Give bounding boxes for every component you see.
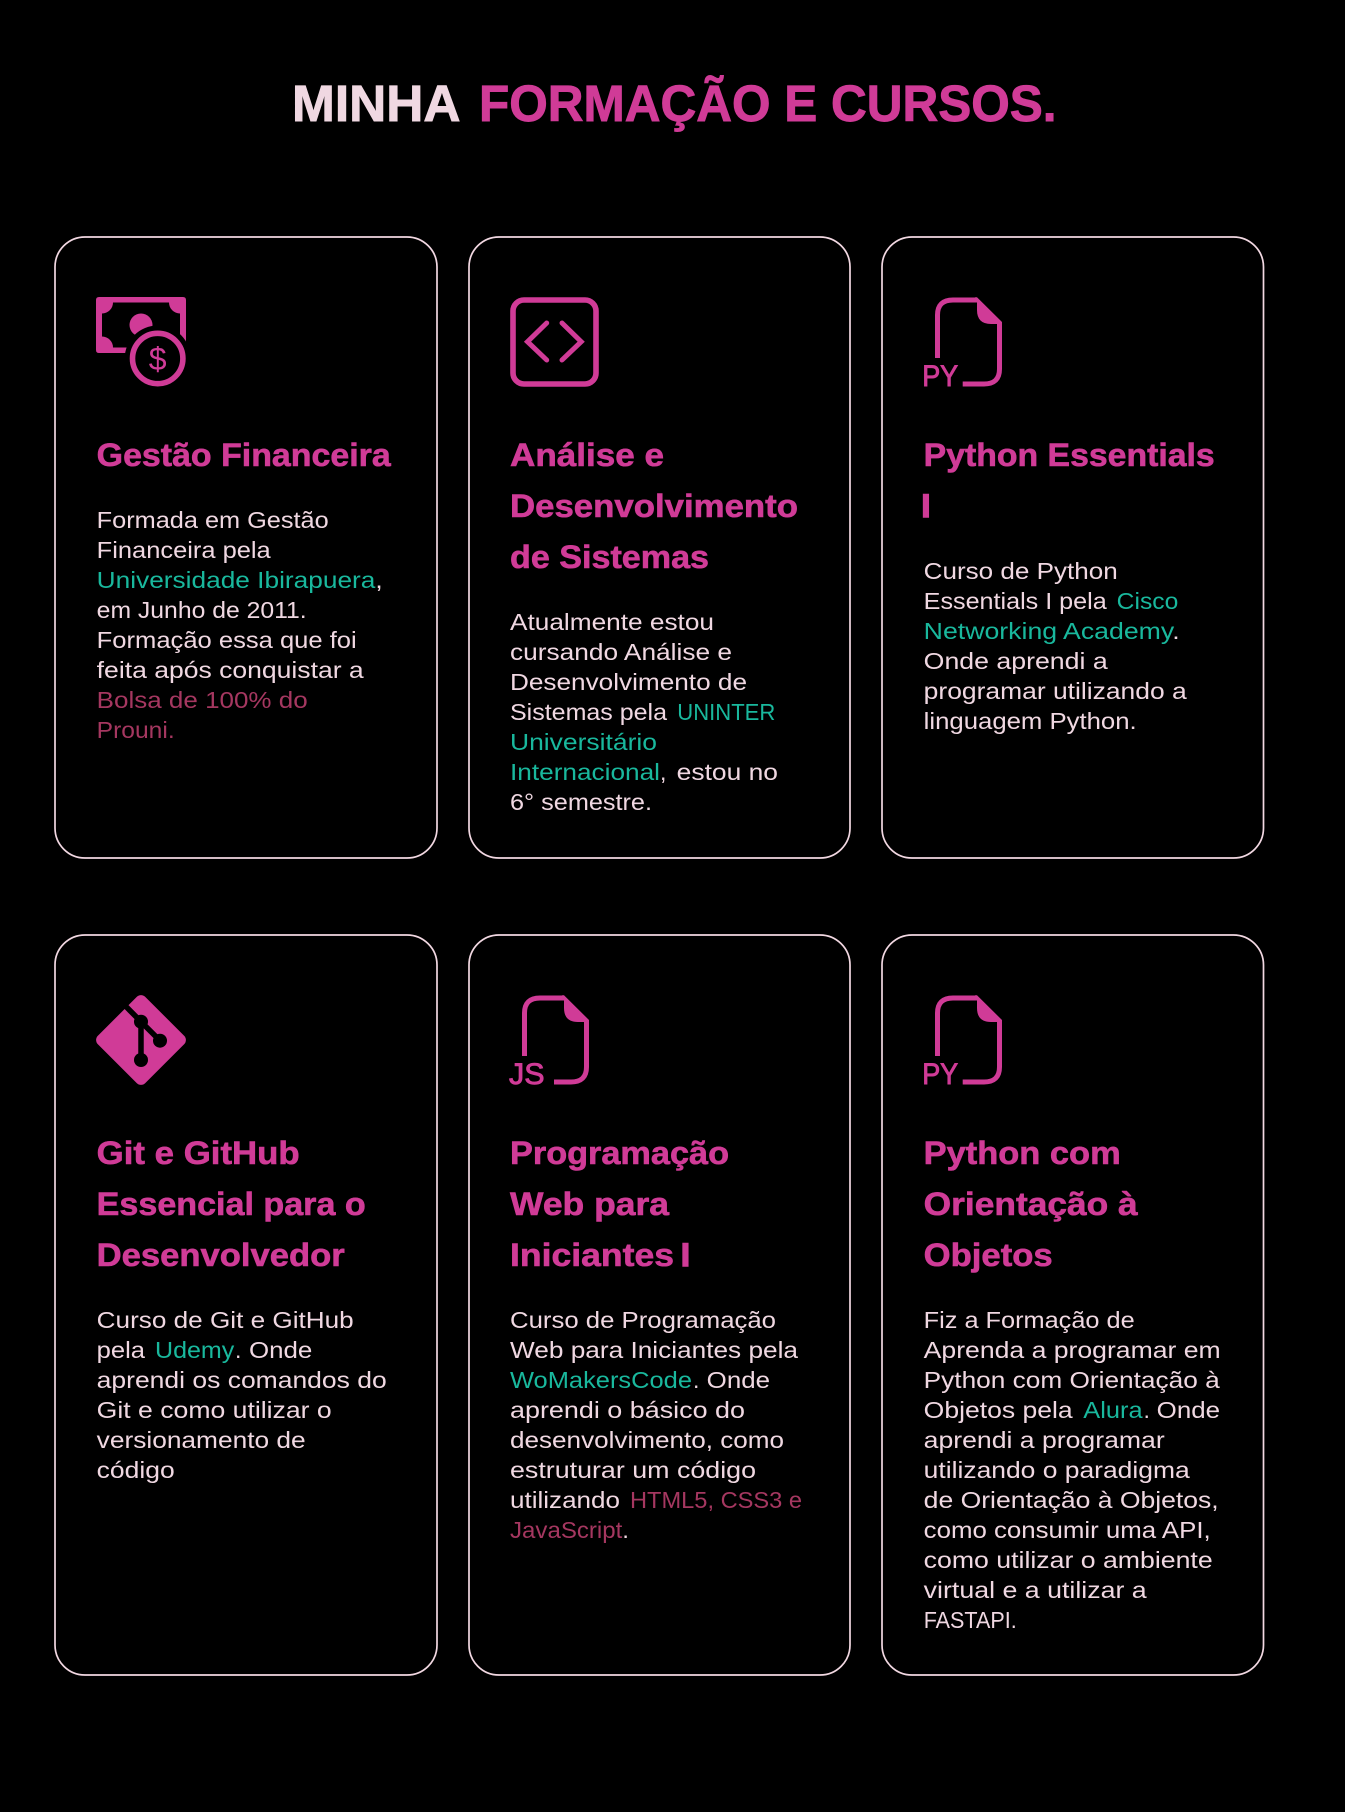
text block: estou no xyxy=(677,759,778,785)
text block: . xyxy=(1144,1397,1150,1423)
panel: Gestão Financeira xyxy=(55,237,437,858)
heading: de Sistemas xyxy=(510,539,709,575)
text block: de Orientação à Objetos, xyxy=(924,1487,1219,1513)
text block: como utilizar o ambiente xyxy=(924,1547,1213,1573)
text block: Financeira pela xyxy=(97,537,271,563)
icon: money bill and coin: $ xyxy=(149,341,167,377)
text block: Universitário xyxy=(510,729,657,755)
text block: FASTAPI. xyxy=(924,1607,1017,1633)
heading: Objetos xyxy=(924,1237,1053,1273)
text block: pela xyxy=(97,1337,145,1363)
text block: feita após conquistar a xyxy=(97,657,364,683)
icon: JS file xyxy=(509,995,589,1091)
icon: git logo xyxy=(94,993,188,1087)
text block xyxy=(97,1307,387,1483)
icon: PY file: PY xyxy=(922,1058,958,1091)
text block: Fiz a Formação de xyxy=(924,1307,1135,1333)
heading: Iniciantes xyxy=(510,1237,674,1273)
text block: programar utilizando a xyxy=(924,678,1187,704)
text block: utilizando xyxy=(510,1487,620,1513)
text block: Curso de Programação xyxy=(510,1307,776,1333)
text block: em Junho de 2011. xyxy=(97,597,307,623)
heading: Python Essentials xyxy=(924,437,1215,473)
text block: virtual e a utilizar a xyxy=(924,1577,1147,1603)
title: FORMAÇÃO E CURSOS. xyxy=(479,74,1056,132)
text block: aprendi a programar xyxy=(924,1427,1165,1453)
text block: linguagem Python. xyxy=(924,708,1137,734)
icon: JS file: JS xyxy=(509,1058,544,1091)
text block: código xyxy=(97,1457,175,1483)
text block: Aprenda a programar em xyxy=(924,1337,1221,1363)
text block: Cisco xyxy=(1117,588,1178,614)
heading xyxy=(922,437,1215,524)
text block: como consumir uma API, xyxy=(924,1517,1211,1543)
heading: Programação xyxy=(510,1135,729,1171)
text block: versionamento de xyxy=(97,1427,306,1453)
heading: Git e GitHub xyxy=(97,1135,300,1171)
heading: Orientação à xyxy=(924,1186,1138,1222)
text block: HTML5, CSS3 e xyxy=(630,1487,802,1513)
text block xyxy=(510,1307,802,1543)
text block xyxy=(510,609,778,815)
icon: code brackets xyxy=(513,300,596,384)
text block xyxy=(924,1307,1221,1633)
heading: Desenvolvedor xyxy=(97,1237,345,1273)
heading xyxy=(97,1135,366,1273)
heading xyxy=(510,1135,729,1273)
text block: aprendi o básico do xyxy=(510,1397,745,1423)
text block: estruturar um código xyxy=(510,1457,756,1483)
text block: . xyxy=(235,1337,241,1363)
heading: Gestão Financeira xyxy=(97,437,391,473)
text block: Onde aprendi a xyxy=(924,648,1108,674)
text block: Onde xyxy=(1157,1397,1220,1423)
text block: Curso de Python xyxy=(924,558,1118,584)
heading: Essencial para o xyxy=(97,1186,366,1222)
text block: desenvolvimento, como xyxy=(510,1427,784,1453)
text block: Onde xyxy=(249,1337,312,1363)
icon: PY file xyxy=(922,995,1002,1091)
heading xyxy=(510,437,798,575)
heading: Análise e xyxy=(510,437,664,473)
text block: Prouni. xyxy=(97,717,175,743)
text block: Universidade Ibirapuera , xyxy=(97,567,383,593)
text block: Objetos pela xyxy=(924,1397,1073,1423)
text block: aprendi os comandos do xyxy=(97,1367,387,1393)
heading: I xyxy=(922,488,930,524)
text block: Curso de Git e GitHub xyxy=(97,1307,354,1333)
text block: UNINTER xyxy=(677,699,775,725)
text block: Onde xyxy=(707,1367,770,1393)
text block: JavaScript. xyxy=(510,1517,629,1543)
text block: Bolsa de 100% do xyxy=(97,687,308,713)
text block: WoMakersCode xyxy=(510,1367,692,1393)
title: MINHA xyxy=(292,75,460,132)
text block: Essentials I pela xyxy=(924,588,1107,614)
heading: I xyxy=(681,1237,690,1273)
panel: Git e GitHub xyxy=(55,935,437,1675)
text block xyxy=(97,507,383,743)
icon: money bill and coin xyxy=(96,297,191,392)
text block: Python com Orientação à xyxy=(924,1367,1220,1393)
icon: PY file xyxy=(922,297,1002,393)
text block: Formada em Gestão xyxy=(97,507,329,533)
heading: Python com xyxy=(924,1135,1121,1171)
panel: Análise e Desenvolvimento de Sistemas xyxy=(469,237,850,858)
panel: Programação Web para Iniciantes I xyxy=(469,935,850,1675)
text block: Internacional xyxy=(510,759,660,785)
text block: Alura xyxy=(1083,1397,1143,1423)
text block: Web para Iniciantes pela xyxy=(510,1337,798,1363)
text block: Sistemas pela xyxy=(510,699,667,725)
text block: Desenvolvimento de xyxy=(510,669,747,695)
text block: Udemy xyxy=(155,1337,235,1363)
heading: Desenvolvimento xyxy=(510,488,798,524)
text block: . xyxy=(693,1367,699,1393)
text block: Git e como utilizar o xyxy=(97,1397,332,1423)
text block xyxy=(924,558,1187,734)
panel: Python Essentials I xyxy=(882,237,1264,858)
heading xyxy=(924,1135,1138,1273)
text block: Atualmente estou xyxy=(510,609,714,635)
text block: Formação essa que foi xyxy=(97,627,357,653)
text block: cursando Análise e xyxy=(510,639,732,665)
heading: Web para xyxy=(510,1186,669,1222)
icon: PY file: PY xyxy=(922,360,958,393)
text block: , xyxy=(660,759,666,785)
text block: 6° semestre. xyxy=(510,789,652,815)
text block: utilizando o paradigma xyxy=(924,1457,1190,1483)
panel: Python com Orientação à Objetos xyxy=(882,935,1264,1675)
text block: Networking Academy . xyxy=(924,618,1180,644)
